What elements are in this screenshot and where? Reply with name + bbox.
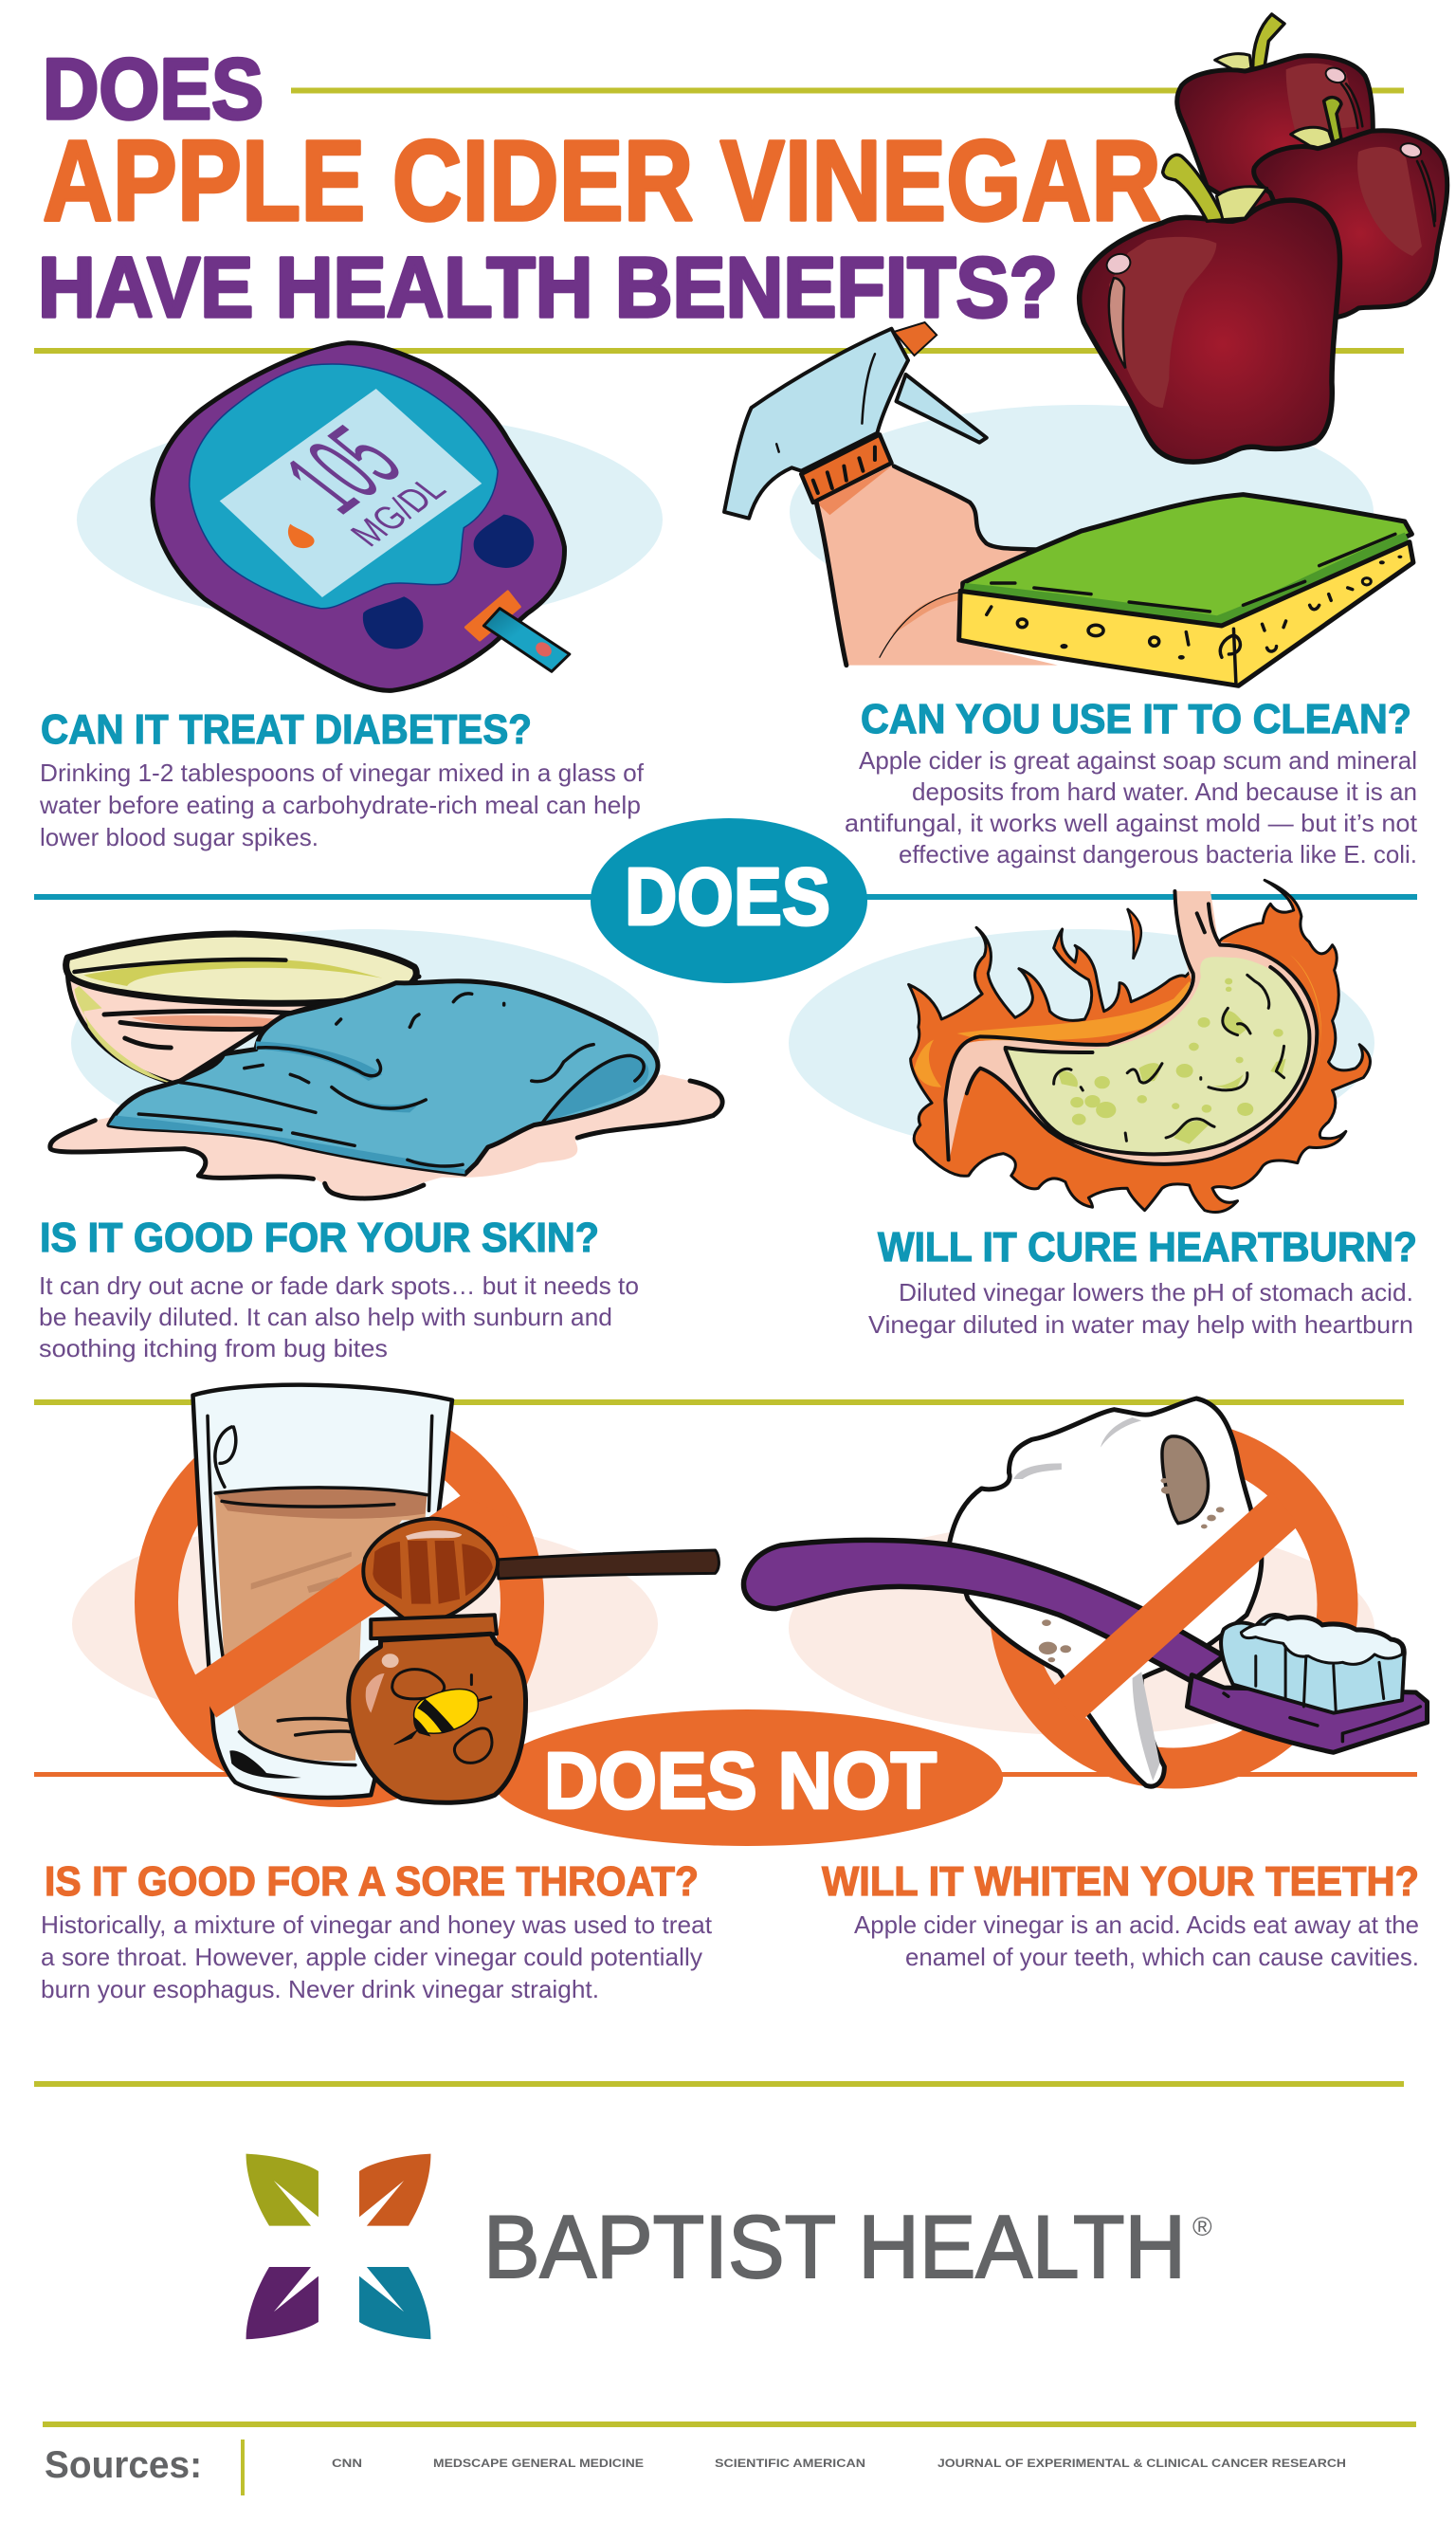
text: skin bbox=[39, 1271, 639, 1362]
text: diabetes: Drinking 1-2 tablespoons of vinegar mixed in a glass of bbox=[40, 758, 645, 787]
panel: cleaning bbox=[724, 322, 1418, 868]
divider: does not bbox=[34, 1772, 1417, 1777]
badge: does not bbox=[491, 1709, 1003, 1846]
text: teeth: enamel of your teeth, which can cause cavities. bbox=[905, 1943, 1419, 1971]
sources bbox=[45, 2440, 1346, 2495]
badge: does not: DOES NOT bbox=[544, 1736, 937, 1825]
text: heartburn bbox=[868, 1278, 1413, 1339]
registered mark: ® bbox=[1192, 2212, 1212, 2241]
text: skin: soothing itching from bug bites bbox=[39, 1334, 388, 1362]
source: medscape: MEDSCAPE GENERAL MEDICINE bbox=[433, 2457, 644, 2470]
meter unit: MG/DL bbox=[341, 469, 455, 554]
text: cleaning: Apple cider is great against soap scum and mineral bbox=[859, 746, 1417, 775]
heading: skin: IS IT GOOD FOR YOUR SKIN? bbox=[40, 1215, 599, 1261]
meter reading: 105 bbox=[262, 408, 426, 532]
title line: apple cider vinegar: APPLE CIDER VINEGAR bbox=[43, 116, 1161, 245]
heading: diabetes: CAN IT TREAT DIABETES? bbox=[41, 706, 532, 753]
source: cnn: CNN bbox=[332, 2457, 362, 2470]
text: skin: be heavily diluted. It can also help with sunburn and bbox=[39, 1303, 612, 1331]
wordmark: BAPTIST HEALTH bbox=[483, 2197, 1186, 2296]
text: diabetes: lower blood sugar spikes. bbox=[40, 823, 318, 851]
heading: sore throat: IS IT GOOD FOR A SORE THROAT? bbox=[45, 1858, 699, 1905]
heading: teeth: WILL IT WHITEN YOUR TEETH? bbox=[822, 1858, 1419, 1905]
icon: apples bbox=[1080, 14, 1447, 462]
icon: prohibited tooth and toothbrush bbox=[744, 1398, 1428, 1786]
source: scientific american: SCIENTIFIC AMERICAN bbox=[715, 2457, 865, 2470]
icon: stomach on fire bbox=[909, 880, 1370, 1213]
text: diabetes bbox=[39, 758, 645, 851]
heading: heartburn: WILL IT CURE HEARTBURN? bbox=[878, 1224, 1417, 1270]
text: heartburn: Vinegar diluted in water may help with heartburn bbox=[868, 1310, 1413, 1339]
text: diabetes: water before eating a carbohydrate-rich meal can help bbox=[39, 791, 641, 819]
panel: teeth bbox=[744, 1398, 1428, 1971]
text: sore throat bbox=[41, 1910, 713, 2003]
icon: spray bottle, hand and sponge bbox=[724, 322, 1413, 685]
panel: heartburn bbox=[789, 880, 1417, 1339]
icon: glucose meter bbox=[153, 343, 570, 690]
panel: diabetes bbox=[39, 343, 663, 851]
text: cleaning: antifungal, it works well against mold — but it’s not bbox=[845, 809, 1418, 837]
title line: have health benefits: HAVE HEALTH BENEFITS? bbox=[38, 241, 1058, 336]
heading: cleaning: CAN YOU USE IT TO CLEAN? bbox=[861, 696, 1411, 742]
panel: skin bbox=[39, 929, 722, 1362]
panel: sore throat bbox=[41, 1385, 719, 2003]
text: heartburn: Diluted vinegar lowers the pH of stomach acid. bbox=[899, 1278, 1413, 1307]
source: journal: JOURNAL OF EXPERIMENTAL & CLINICAL CANCER RESEARCH bbox=[937, 2457, 1346, 2470]
text: cleaning: effective against dangerous bacteria like E. coli. bbox=[899, 840, 1417, 868]
icon: prohibited glass of vinegar with honey bbox=[156, 1385, 719, 1802]
sources label: Sources: bbox=[45, 2444, 202, 2486]
logo: baptist health bbox=[246, 2154, 1212, 2339]
text: teeth: Apple cider vinegar is an acid. Acids eat away at the bbox=[854, 1910, 1419, 1939]
badge: does bbox=[591, 818, 867, 983]
text: cleaning: deposits from hard water. And because it is an bbox=[912, 777, 1417, 806]
text: sore throat: a sore throat. However, apple cider vinegar could potentially bbox=[41, 1943, 702, 1971]
icon: bowl and towel bbox=[50, 934, 722, 1198]
text: teeth bbox=[854, 1910, 1419, 1971]
badge: does: DOES bbox=[625, 852, 830, 942]
icon: four-leaf mark bbox=[246, 2154, 430, 2339]
title bbox=[38, 42, 1161, 336]
text: sore throat: Historically, a mixture of vinegar and honey was used to treat bbox=[41, 1910, 713, 1939]
text: cleaning bbox=[845, 746, 1418, 868]
divider: does bbox=[34, 894, 1417, 900]
text: sore throat: burn your esophagus. Never drink vinegar straight. bbox=[41, 1975, 599, 2003]
title line: does: DOES bbox=[43, 42, 264, 137]
text: skin: It can dry out acne or fade dark spots… but it needs to bbox=[39, 1271, 639, 1300]
